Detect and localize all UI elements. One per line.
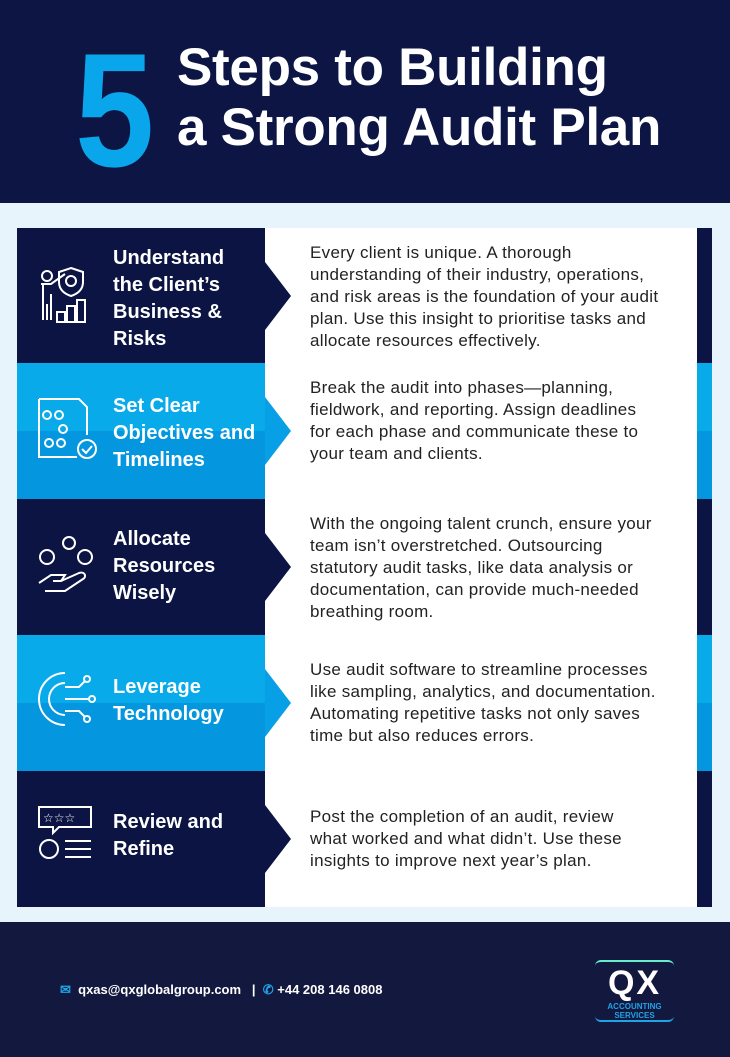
description: time but also reduces errors. xyxy=(310,726,534,745)
icon: technology gear circuit xyxy=(38,672,96,726)
heading xyxy=(113,528,215,604)
description: plan. Use this insight to prioritise tasks and xyxy=(310,309,646,328)
icon: review stars: ☆☆☆ xyxy=(43,811,75,825)
description: Every client is unique. A thorough xyxy=(310,243,572,262)
heading xyxy=(113,811,223,860)
title: a Strong Audit Plan xyxy=(177,98,661,157)
description: what worked and what didn’t. Use these xyxy=(310,829,622,848)
big number 5: 5 xyxy=(75,20,154,201)
description: documentation, can provide much-needed xyxy=(310,580,639,599)
logo xyxy=(595,960,674,1022)
heading: Objectives and xyxy=(113,422,255,444)
description: Post the completion of an audit, review xyxy=(310,807,614,826)
description: understanding of their industry, operations, xyxy=(310,265,644,284)
heading: Business & xyxy=(113,301,222,323)
description: allocate resources effectively. xyxy=(310,331,541,350)
logo: QX xyxy=(608,964,661,1002)
heading xyxy=(113,247,224,350)
logo: SERVICES xyxy=(614,1011,655,1020)
heading: Review and xyxy=(113,811,223,833)
description: team isn’t overstretched. Outsourcing xyxy=(310,536,603,555)
heading: Technology xyxy=(113,703,224,725)
description xyxy=(310,378,638,463)
description xyxy=(310,243,658,350)
heading: Resources xyxy=(113,555,215,577)
description: Use audit software to streamline processes xyxy=(310,660,648,679)
title xyxy=(177,38,661,157)
row 2 xyxy=(17,363,712,499)
heading: Understand xyxy=(113,247,224,269)
heading: Leverage xyxy=(113,676,201,698)
description: insights to improve next year’s plan. xyxy=(310,851,592,870)
header xyxy=(0,0,730,203)
description xyxy=(310,807,622,870)
description: like sampling, analytics, and documentation. xyxy=(310,682,656,701)
description xyxy=(310,514,652,621)
heading: Refine xyxy=(113,838,174,860)
description: for each phase and communicate these to xyxy=(310,422,638,441)
contact info: ✉ qxas@qxglobalgroup.com | ✆ +44 208 146 0808 xyxy=(60,982,382,997)
heading: Allocate xyxy=(113,528,191,550)
footer xyxy=(0,922,730,1057)
heading: Wisely xyxy=(113,582,176,604)
description xyxy=(310,660,656,745)
description: and risk areas is the foundation of your audit xyxy=(310,287,658,306)
heading: Timelines xyxy=(113,449,205,471)
description: your team and clients. xyxy=(310,444,483,463)
heading: Risks xyxy=(113,328,166,350)
icon: person with shield xyxy=(41,267,86,323)
description: fieldwork, and reporting. Assign deadlines xyxy=(310,400,636,419)
description: Automating repetitive tasks not only saves xyxy=(310,704,640,723)
heading xyxy=(113,676,224,725)
icon: timeline document xyxy=(38,398,97,459)
title: Steps to Building xyxy=(177,38,608,97)
heading: Set Clear xyxy=(113,395,200,417)
description: With the ongoing talent crunch, ensure your xyxy=(310,514,652,533)
description: statutory audit tasks, like data analysis or xyxy=(310,558,633,577)
icon: hand with resources xyxy=(38,536,93,592)
row 4 xyxy=(17,635,712,771)
row 5 xyxy=(17,771,712,907)
description: Break the audit into phases—planning, xyxy=(310,378,613,397)
description: breathing room. xyxy=(310,602,434,621)
row 3 xyxy=(17,499,712,635)
icon: review stars xyxy=(38,806,92,859)
heading: the Client’s xyxy=(113,274,220,296)
row 1 xyxy=(17,228,712,363)
logo: ACCOUNTING xyxy=(607,1002,662,1011)
heading xyxy=(113,395,255,471)
